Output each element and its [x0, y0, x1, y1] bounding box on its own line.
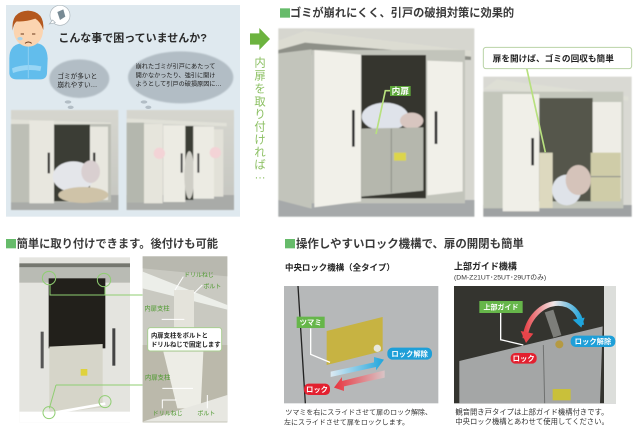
photo: shed with inner door	[278, 28, 474, 217]
text: when inner door installed: 内	[254, 56, 266, 70]
speech cloud: garbage collapses: 崩れやすい…	[57, 80, 97, 89]
photo: shed with jammed door	[127, 110, 234, 210]
subheading: top guide: 上部ガイド機構	[454, 261, 517, 272]
photo: central lock	[284, 286, 438, 403]
heading: problem question: こんな事で困っていませんか?	[58, 31, 207, 45]
photo: door front	[19, 257, 143, 422]
speech cloud: door damage	[128, 51, 233, 109]
icon: thought bubble with trash	[49, 5, 70, 25]
label: knob: ツマミ	[300, 318, 322, 327]
subheading: top guide	[454, 261, 546, 282]
arrow: rotate guide	[521, 303, 585, 343]
callout circles	[42, 271, 143, 419]
label: inner door: 内扉	[392, 85, 409, 96]
labels on detail photo: ドリルねじ	[153, 411, 183, 418]
photo: top guide	[454, 286, 616, 403]
heading: easy installation: 簡単に取り付けできます。後付けも可能	[17, 237, 218, 251]
text: central lock description	[284, 408, 432, 426]
speech cloud: garbage collapses: ゴミが多いと	[57, 71, 97, 80]
text: when inner door installed: り	[254, 108, 266, 121]
callout: fix with bolts	[148, 328, 222, 351]
arrow: slide to lock	[334, 370, 385, 391]
label: knob	[297, 317, 330, 362]
callout: fix with bolts: ドリルねじで固定します	[151, 341, 221, 349]
speech cloud: door damage: 開かなかったり、強引に開け	[136, 71, 215, 79]
speech cloud: door damage: 崩れたゴミが引戸にあたって	[136, 63, 215, 71]
badge: lock	[304, 384, 330, 395]
badge: unlock	[387, 348, 432, 360]
badge: unlock	[571, 336, 615, 347]
labels on detail photo: ドリルねじ	[184, 272, 214, 279]
text: top guide description	[455, 407, 609, 426]
heading: lock mechanism: 操作しやすいロック機構で、扉の開閉も簡単	[296, 237, 524, 251]
text: when inner door installed: 取	[254, 96, 266, 108]
text: central lock description: ツマミを右にスライドさせて扉のロック解除、	[285, 408, 432, 417]
text: top guide description: 観音開き戸タイプは上部ガイド機構付きです。	[455, 407, 608, 416]
callout: fix with bolts: 内扉支柱をボルトと	[151, 331, 208, 340]
labels on detail photo: 内扉支柱	[144, 304, 170, 313]
labels on detail photo: ボルト	[197, 410, 215, 418]
text: top guide description: 中央ロック機構とあわせて使用してください。	[455, 417, 609, 426]
text: when inner door installed: …	[254, 170, 266, 182]
text: when inner door installed: ば	[254, 159, 266, 172]
callout: easy garbage collection	[483, 47, 632, 152]
labels on detail photo: ボルト	[203, 282, 221, 290]
badge: unlock: ロック解除	[391, 349, 429, 358]
panel: common problems	[6, 5, 270, 217]
icon: worried man	[9, 11, 48, 79]
label: top guide	[479, 301, 523, 345]
text: when inner door installed: れ	[254, 146, 266, 159]
badge: unlock: ロック解除	[575, 337, 612, 346]
labels on detail photo: 内扉支柱	[145, 372, 171, 381]
text: central lock description: 左にスライドさせて扉をロックします。	[284, 417, 409, 426]
subheading: top guide: (DM-Z21UT･25UT･29UTのみ)	[454, 274, 546, 282]
arrow: green right	[250, 28, 270, 50]
photo: shed with collapsed garbage	[11, 110, 118, 210]
section: effective against damage	[278, 6, 632, 217]
text: when inner door installed: 付	[254, 121, 266, 134]
callout: easy garbage collection: 扉を開けば、ゴミの回収も簡単	[493, 52, 614, 63]
label: inner door	[376, 85, 411, 134]
subheading: central lock: 中央ロック機構（全タイプ）	[285, 262, 395, 272]
section: lock mechanism	[284, 237, 616, 426]
arrow: slide to unlock	[331, 357, 384, 377]
section: easy installation	[6, 237, 227, 422]
text: when inner door installed: 扉	[254, 69, 266, 82]
labels on detail photo	[144, 272, 221, 418]
badge: lock: ロック	[306, 385, 328, 394]
text: when inner door installed	[254, 56, 266, 182]
heading: collapse prevention: ゴミが崩れにくく、引戸の破損対策に効果的	[290, 6, 514, 20]
text: when inner door installed: け	[254, 133, 266, 146]
text: when inner door installed: を	[254, 83, 266, 96]
photo: detail of fastening	[143, 256, 227, 422]
speech cloud: garbage collapses	[49, 59, 109, 109]
speech cloud: door damage: ようとして引戸の破損原因に…	[136, 80, 222, 88]
label: top guide: 上部ガイド	[484, 303, 518, 312]
badge: lock: ロック	[513, 354, 535, 363]
photo: shed doors open	[483, 77, 632, 217]
